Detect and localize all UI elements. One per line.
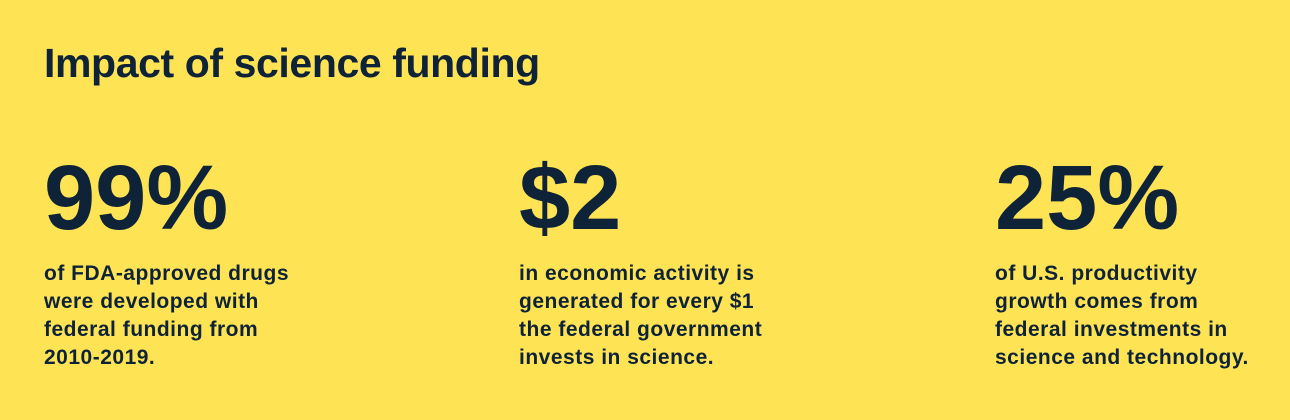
description (995, 262, 1249, 369)
description (519, 262, 762, 369)
description: federal funding from (44, 318, 258, 341)
number: 99% (44, 147, 228, 249)
stat: $2 (519, 147, 762, 369)
description: science and technology. (995, 346, 1249, 369)
description: 2010-2019. (44, 346, 155, 369)
description: federal investments in (995, 318, 1228, 341)
stat: 99% (44, 147, 289, 369)
description: generated for every $1 (519, 290, 754, 313)
number: $2 (519, 147, 621, 249)
description: were developed with (44, 290, 259, 313)
description: invests in science. (519, 346, 714, 369)
description: the federal government (519, 318, 762, 341)
stat: 25% (995, 147, 1249, 369)
description: of FDA-approved drugs (44, 262, 289, 285)
description: of U.S. productivity (995, 262, 1198, 285)
number: 25% (995, 147, 1179, 249)
description: in economic activity is (519, 262, 755, 285)
description: growth comes from (995, 290, 1198, 313)
description (44, 262, 289, 369)
title: Impact of science funding (44, 40, 540, 86)
